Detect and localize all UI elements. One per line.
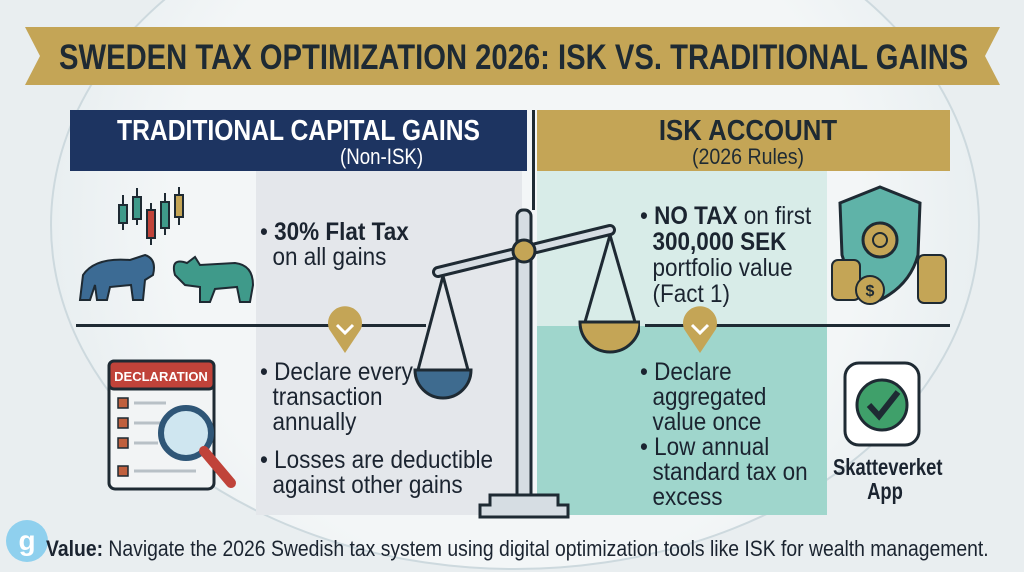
text: low annual tax: excess [653, 483, 723, 511]
panel: ISK teal upper [537, 171, 827, 326]
left header [70, 110, 527, 171]
right header [537, 110, 950, 171]
icon: bear and bull [78, 254, 254, 303]
text: losses deductible [260, 446, 493, 499]
text: declare aggregated [640, 358, 766, 436]
text: 30% flat tax: • 30% Flat Tax [260, 218, 409, 246]
text: 30% flat tax [260, 218, 409, 271]
text: low annual tax: • Low annual [640, 433, 769, 461]
icon: logo: ɡ [18, 525, 36, 556]
text: declare every transaction [260, 358, 413, 436]
text: losses deductible: • Losses are deductible [260, 446, 493, 474]
right header: (2026 Rules) [692, 144, 804, 169]
left header: (Non-ISK) [340, 144, 423, 169]
divider lines [76, 324, 426, 327]
text: 30% flat tax: on all gains [273, 243, 386, 271]
panel: ISK teal lower [537, 326, 827, 515]
text: declare aggregated: value once [653, 408, 761, 436]
text: no tax [640, 202, 812, 308]
title: SWEDEN TAX OPTIMIZATION 2026: ISK VS. TRADITIONAL GAINS [59, 38, 968, 77]
icon: shield and coins: $ [866, 283, 875, 300]
text: no tax: (Fact 1) [653, 280, 730, 308]
text: low annual tax [640, 433, 808, 511]
text: no tax: portfolio value [653, 254, 793, 282]
icon: chevron markers [328, 306, 362, 353]
label: Skatteverket App [833, 454, 942, 504]
text: declare aggregated: • Declare [640, 358, 732, 386]
right header: ISK ACCOUNT [659, 115, 837, 147]
icon: declaration form with magnifier: DECLARATION [114, 369, 208, 384]
title banner [25, 27, 1000, 85]
icon: Skatteverket app [844, 362, 920, 446]
icon: candlesticks [118, 187, 184, 245]
icon: logo [6, 520, 48, 562]
left header: TRADITIONAL CAPITAL GAINS [117, 115, 480, 147]
text: declare every transaction: annually [273, 408, 356, 436]
text: no tax: 300,000 SEK [653, 228, 786, 256]
label: Skatteverket App: Skatteverket [833, 454, 942, 480]
icon: shield and coins [831, 185, 947, 305]
text: declare every transaction: transaction [273, 383, 383, 411]
icon: declaration form with magnifier [108, 360, 236, 490]
text: declare every transaction: • Declare every [260, 358, 413, 386]
footer text: Value: Navigate the 2026 Swedish tax system using digital optimization tools like ISK for wealth management. [46, 536, 989, 561]
text: losses deductible: against other gains [273, 471, 463, 499]
text: no tax: • NO TAX on first [640, 202, 811, 230]
text: declare aggregated: aggregated [653, 383, 766, 411]
center divider line [532, 110, 535, 210]
text: low annual tax: standard tax on [653, 458, 808, 486]
label: Skatteverket App: App [867, 478, 903, 504]
panel: traditional gray [256, 171, 522, 515]
icon: balance scale [414, 208, 640, 518]
